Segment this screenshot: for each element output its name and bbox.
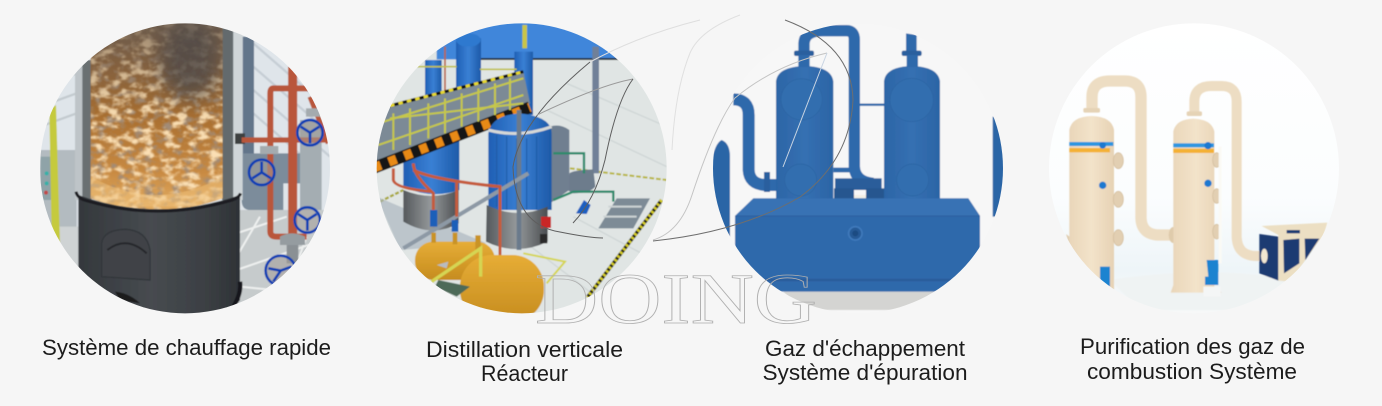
caption: flue gas purification system: combustion Système: [1087, 359, 1297, 384]
panel: exhaust gas cleaning system image: [710, 20, 1008, 317]
watermark: DOING logo: DOING: [535, 259, 817, 339]
panel: flue gas purification system image: [1049, 23, 1339, 313]
watermark: DOING logo: [513, 15, 853, 339]
caption: vertical distillation reactor: [426, 337, 623, 386]
caption: exhaust gas cleaning system: Système d'épuration: [762, 360, 968, 385]
caption: exhaust gas cleaning system: [762, 336, 968, 385]
panel: rapid heating system image: [40, 23, 330, 314]
caption: exhaust gas cleaning system: Gaz d'échappement: [765, 336, 966, 361]
caption: flue gas purification system: Purification des gaz de: [1080, 334, 1305, 359]
caption: rapid heating system: Système de chauffage rapide: [42, 335, 331, 360]
caption: vertical distillation reactor: Réacteur: [481, 361, 568, 386]
caption: flue gas purification system: [1080, 334, 1305, 384]
caption: vertical distillation reactor: Distillation verticale: [426, 337, 623, 362]
panel: vertical distillation reactor image: [373, 17, 673, 323]
